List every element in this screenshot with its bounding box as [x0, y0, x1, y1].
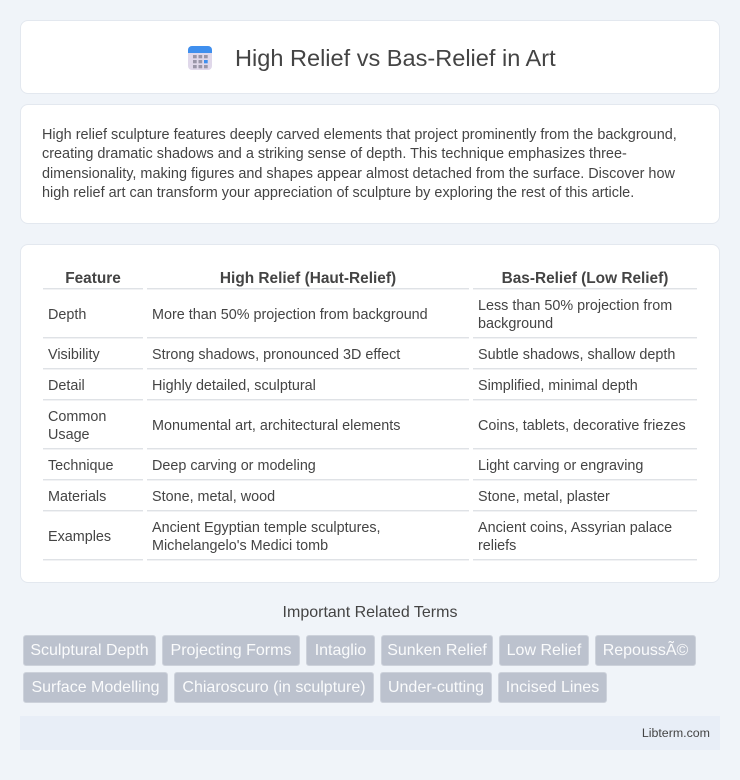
- header panel: [20, 20, 720, 94]
- row: Technique: Deep carving or modeling: [152, 458, 316, 474]
- row: Technique: Technique: [48, 458, 114, 474]
- row: Detail: Simplified, minimal depth: [478, 378, 638, 394]
- row: Materials: [48, 489, 610, 505]
- row: Visibility: Subtle shadows, shallow depth: [478, 347, 675, 363]
- row: Visibility: Visibility: [48, 347, 100, 363]
- tag: [380, 672, 492, 703]
- tag: [162, 635, 300, 666]
- row: Visibility: Strong shadows, pronounced 3D effect: [152, 347, 400, 363]
- row: Visibility: [48, 347, 675, 363]
- row: Detail: Detail: [48, 378, 85, 394]
- row: Depth: background: [478, 316, 553, 332]
- row: Examples: [48, 520, 672, 554]
- row: Examples: Examples: [48, 529, 111, 545]
- footer bar: [20, 716, 720, 750]
- tag: [23, 635, 156, 666]
- tag: Sculptural Depth: [30, 642, 149, 659]
- row: Common Usage: Usage: [48, 427, 90, 443]
- row: Depth: Less than 50% projection from: [478, 298, 672, 314]
- row: Examples: Michelangelo's Medici tomb: [152, 538, 328, 554]
- row: Examples: Ancient coins, Assyrian palace: [478, 520, 672, 536]
- title: High Relief vs Bas-Relief in Art: [235, 45, 556, 71]
- tag: [381, 635, 493, 666]
- tag: Low Relief: [507, 642, 581, 659]
- tag: Chiaroscuro (in sculpture): [182, 679, 366, 696]
- row: Detail: Highly detailed, sculptural: [152, 378, 316, 394]
- row: Examples: reliefs: [478, 538, 516, 554]
- row: Technique: Light carving or engraving: [478, 458, 643, 474]
- tag: [498, 672, 607, 703]
- row: Materials: Stone, metal, plaster: [478, 489, 610, 505]
- tag: Intaglio: [315, 642, 366, 659]
- tag: Incised Lines: [506, 679, 599, 696]
- tag: [499, 635, 589, 666]
- row: Detail: [48, 378, 638, 394]
- tag: Projecting Forms: [171, 642, 291, 659]
- table header: Feature: [65, 270, 121, 287]
- row: Common Usage: [48, 409, 686, 443]
- row: Materials: Materials: [48, 489, 106, 505]
- panel: introduction: [20, 104, 720, 224]
- intro text: High relief sculpture features deeply carved elements that project prominently from the background,: [42, 127, 677, 143]
- table header: Bas-Relief (Low Relief): [502, 270, 668, 287]
- footer credit: Libterm.com: [642, 726, 710, 740]
- tag: [595, 635, 696, 666]
- intro text: [42, 127, 677, 201]
- related terms tags: [23, 635, 696, 703]
- row: Common Usage: Common: [48, 409, 106, 425]
- tag: Under-cutting: [388, 679, 484, 696]
- tag: Surface Modelling: [31, 679, 160, 696]
- intro text: dimensionality, making figures and shapes appear almost detached from the surface. Discover how: [42, 166, 675, 182]
- icon: calendar: [188, 46, 212, 70]
- panel: comparison table: [20, 244, 720, 583]
- table header: High Relief (Haut-Relief): [220, 270, 396, 287]
- row: Depth: [48, 298, 672, 332]
- intro text: creating dramatic shadows and a striking sense of depth. This technique emphasizes three-: [42, 146, 627, 162]
- row: Depth: More than 50% projection from background: [152, 307, 428, 323]
- tag: RepoussÃ©: [603, 642, 688, 659]
- table header: [65, 270, 668, 287]
- tag: [174, 672, 374, 703]
- intro text: high relief art can transform your appreciation of sculpture by exploring the rest of this article.: [42, 185, 634, 201]
- tag: [306, 635, 375, 666]
- tag: [23, 672, 168, 703]
- row: Examples: Ancient Egyptian temple sculptures,: [152, 520, 381, 536]
- related terms heading: Important Related Terms: [283, 604, 457, 621]
- tag: Sunken Relief: [387, 642, 487, 659]
- row: Depth: Depth: [48, 307, 86, 323]
- row: Common Usage: Monumental art, architectural elements: [152, 418, 400, 434]
- row: Common Usage: Coins, tablets, decorative friezes: [478, 418, 686, 434]
- row: Materials: Stone, metal, wood: [152, 489, 275, 505]
- row: Technique: [48, 458, 643, 474]
